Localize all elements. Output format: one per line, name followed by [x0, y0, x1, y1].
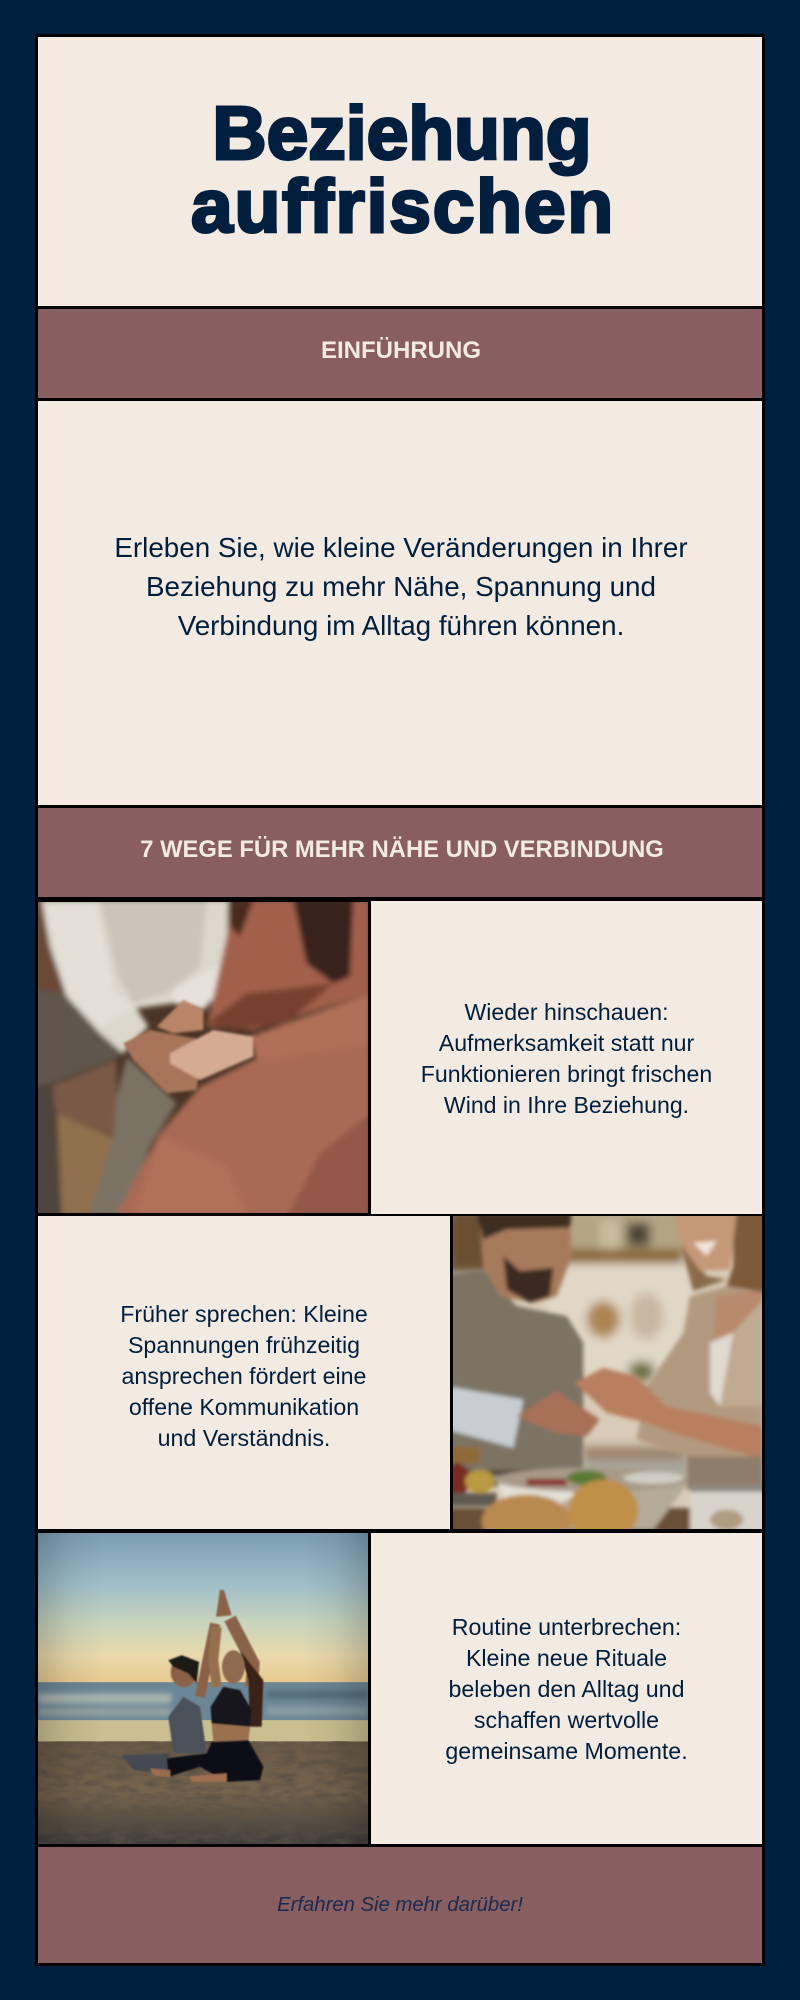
band: seven ways — [38, 808, 762, 897]
text block: third way: gemeinsame Momente. — [445, 1738, 688, 1764]
intro text: Verbindung im Alltag führen können. — [178, 610, 624, 641]
text block: first way: Wind in Ihre Beziehung. — [444, 1092, 689, 1118]
photo: couple doing yoga on the beach — [38, 1533, 368, 1844]
text block: second way: ansprechen fördert eine — [122, 1363, 366, 1389]
text block: first way: Wieder hinschauen: — [464, 999, 669, 1025]
footer text: Erfahren Sie mehr darüber! — [277, 1894, 523, 1916]
panel: title — [38, 37, 762, 306]
text block: second way: und Verständnis. — [158, 1425, 330, 1451]
photo: couple holding hands — [38, 902, 368, 1213]
text block: third way: beleben den Alltag und — [449, 1676, 684, 1702]
text block: first way: Funktionieren bringt frischen — [421, 1061, 712, 1087]
text block: first way — [421, 999, 712, 1118]
panel: text one — [371, 901, 762, 1214]
text block: second way: offene Kommunikation — [129, 1394, 359, 1420]
text block: second way: Früher sprechen: Kleine — [120, 1301, 368, 1327]
intro text: Beziehung zu mehr Nähe, Spannung und — [146, 571, 656, 602]
text block: third way — [445, 1614, 688, 1764]
photo: couple cooking — [453, 1216, 762, 1529]
panel: intro — [38, 401, 762, 805]
title — [191, 91, 615, 248]
title: auffrischen — [191, 164, 615, 248]
intro text — [114, 532, 688, 641]
text block: third way: Routine unterbrechen: — [452, 1614, 681, 1640]
text block: second way: Spannungen frühzeitig — [128, 1332, 360, 1358]
panel: text three — [371, 1533, 762, 1844]
text block: second way — [120, 1301, 368, 1451]
title: Beziehung — [212, 91, 592, 175]
text block: third way: Kleine neue Rituale — [466, 1645, 667, 1671]
text block: third way: schaffen wertvolle — [474, 1707, 659, 1733]
band: introduction — [38, 309, 762, 398]
intro text: Erleben Sie, wie kleine Veränderungen in Ihrer — [114, 532, 688, 563]
heading: Einführung: EINFÜHRUNG — [321, 337, 481, 364]
band: footer — [38, 1847, 762, 1963]
text block: first way: Aufmerksamkeit statt nur — [439, 1030, 694, 1056]
panel: text two — [38, 1216, 450, 1529]
heading: seven ways: 7 WEGE FÜR MEHR NÄHE UND VERBINDUNG — [140, 836, 664, 863]
